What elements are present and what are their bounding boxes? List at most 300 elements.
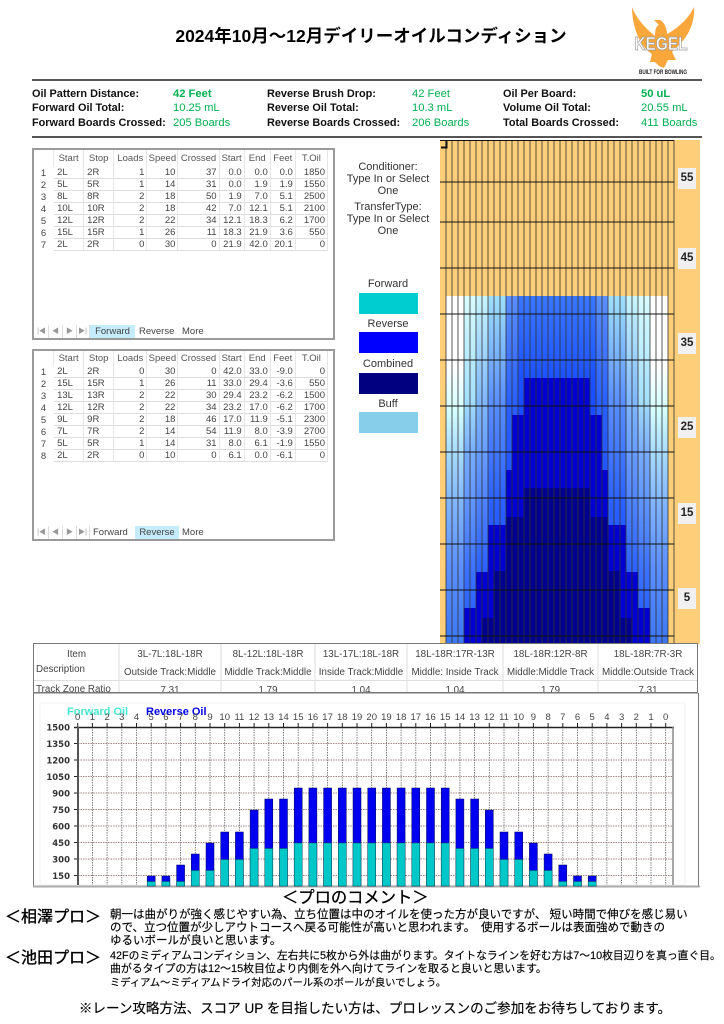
comment: Ikeda: 曲がるタイプの方は12～15枚目位より内側を外へ向けてラインを取ると良いと思います。: [110, 963, 547, 975]
panel: forward table: 1: [139, 167, 144, 178]
panel: forward table: 7.0: [255, 191, 268, 202]
panel: track zone ratio table: [33, 643, 698, 693]
x axis labels: 12: [249, 712, 259, 723]
panel: oil pattern summary: 411 Boards: [641, 116, 697, 128]
panel: reverse table: 2L: [57, 450, 68, 461]
panel: reverse table: 17.0: [249, 402, 268, 413]
panel: forward table: 21.9: [223, 239, 242, 250]
panel: forward table: 12L: [57, 215, 73, 226]
panel: forward table: 12.1: [223, 215, 242, 226]
comment: Aizawa: ゆるいボールが良いと思います。: [110, 935, 281, 947]
bar chart: oil per board: [33, 693, 700, 888]
sheet tabs: reverse: |◀: [37, 529, 46, 536]
x axis labels: 11: [234, 712, 244, 723]
panel: forward table: 2R: [87, 239, 99, 250]
panel: forward table: 1: [139, 179, 144, 190]
panel: reverse table: -3.6: [276, 378, 293, 389]
panel: forward table: 2: [41, 180, 46, 190]
panel: forward table: 20.1: [274, 239, 293, 250]
panel: forward table: 5L: [57, 179, 68, 190]
panel: oil pattern summary: Reverse Oil Total:: [267, 102, 359, 114]
panel: reverse table: 0: [320, 450, 325, 461]
panel: forward table: 0.0: [228, 179, 242, 190]
panel: reverse table: 4: [41, 402, 46, 414]
swatch: forward: [359, 293, 418, 314]
sheet tabs: forward: More: [182, 326, 204, 337]
x axis labels: 6: [163, 712, 169, 723]
panel: reverse table: 8.0: [255, 426, 268, 437]
sheet tabs: forward: Forward: [95, 326, 130, 337]
sheet tabs: reverse: More: [182, 527, 204, 538]
sheet tabs: forward: |◀: [37, 328, 46, 335]
footer note: ※レーン攻略方法、スコア UP を目指したい方は、プロレッスンのご参加をお待ちしております。: [79, 1000, 671, 1016]
panel: forward table: 18: [165, 203, 175, 214]
panel: reverse table: 5R: [87, 438, 99, 449]
y axis labels: 1350: [46, 740, 70, 750]
comment: Ikeda: ミディアム～ミディアムドライ対応のパール系のボールが良いでしょう。: [110, 978, 446, 989]
panel: forward table: 15R: [87, 227, 105, 238]
pro label: Ikeda: ＜池田プロ＞: [5, 950, 101, 967]
y axis labels: 150: [52, 872, 70, 882]
conditioner text: [347, 161, 430, 197]
sheet tabs: forward: ▶|: [78, 328, 87, 335]
panel: forward table: 550: [309, 227, 325, 238]
zone 4: Middle: Inside Track: [411, 667, 499, 678]
conditioner text: Conditioner:: [358, 161, 418, 173]
panel: oil pattern summary: [32, 88, 697, 128]
panel: forward table: 10: [165, 167, 175, 178]
x axis labels: 15: [440, 712, 450, 723]
zone 6: [602, 649, 694, 693]
panel: reverse table: -6.1: [276, 450, 293, 461]
panel: reverse table: -6.2: [276, 402, 293, 413]
panel: reverse table: Speed: [149, 352, 176, 364]
panel: reverse table: 3: [41, 390, 46, 402]
panel: reverse table: 22: [165, 390, 175, 401]
sheet tabs: forward: ▶: [66, 328, 73, 335]
panel: reverse table: 6.1: [228, 450, 242, 461]
x axis labels: 5: [149, 712, 154, 723]
zone 4: [411, 649, 499, 693]
panel: reverse table: 6: [41, 426, 46, 438]
x axis labels: 2: [634, 712, 639, 723]
panel: oil pattern summary: 50 uL: [641, 88, 670, 100]
x axis labels: 7: [178, 712, 183, 723]
panel: reverse table: 2300: [304, 414, 325, 425]
chart legend: [67, 706, 207, 718]
panel: reverse table: 2L: [57, 366, 68, 377]
zone 5: Middle:Middle Track: [507, 667, 594, 678]
pro label: Aizawa: ＜相澤プロ＞: [5, 909, 101, 926]
x axis labels: 17: [411, 712, 421, 723]
panel: forward table: 8R: [87, 191, 99, 202]
x axis labels: 15: [293, 712, 303, 723]
panel: reverse table: 17.0: [223, 414, 242, 425]
y axis labels: 600: [52, 822, 70, 832]
chart legend: Forward Oil: [67, 706, 128, 718]
panel: reverse table: 550: [309, 378, 325, 389]
panel: forward table: 7.0: [228, 203, 242, 214]
zone 1: [124, 649, 216, 693]
logo: Kegel eagle: KEGEL: [634, 34, 688, 54]
row headers: Item: [67, 649, 86, 660]
panel: oil pattern summary: Total Boards Crossed:: [503, 116, 619, 128]
panel: forward table: 37: [206, 167, 217, 178]
transfer type text: TransferType:: [354, 201, 422, 213]
x axis labels: 13: [469, 712, 480, 723]
panel: forward table: Loads: [117, 152, 143, 164]
panel: reverse table: -9.0: [276, 366, 293, 377]
panel: reverse table: 29.4: [249, 378, 268, 389]
distance label 25: [678, 417, 696, 438]
panel: reverse table: [32, 349, 335, 541]
zone 5: [507, 649, 594, 693]
panel: reverse table: 33.0: [249, 366, 268, 377]
board grid lines: [446, 140, 674, 644]
panel: forward table: T.Oil: [302, 152, 321, 164]
panel: reverse table: 14: [165, 438, 175, 449]
sheet tabs: reverse: ◀: [52, 529, 59, 536]
panel: reverse table: 1500: [304, 390, 325, 401]
logo: Kegel eagle: BUILT FOR BOWLING: [639, 70, 687, 76]
panel: reverse table: 0: [320, 366, 325, 377]
panel: oil pattern summary: 10.3 mL: [412, 102, 452, 114]
panel: forward table: 2R: [87, 167, 99, 178]
panel: forward table: 4: [41, 204, 46, 214]
x axis labels: 0: [663, 712, 668, 723]
panel: forward table: 5.1: [280, 203, 293, 214]
panel: reverse table: 11.9: [224, 426, 242, 437]
y axis labels: 1050: [46, 773, 70, 783]
panel: reverse table: 6.1: [255, 438, 268, 449]
zone 1: Outside Track:Middle: [124, 667, 216, 678]
panel: forward table: 8L: [57, 191, 68, 202]
zone 2: 8L-12L:18L-18R: [233, 649, 303, 660]
x axis labels: 1: [648, 712, 654, 723]
panel: reverse table: 7R: [87, 426, 99, 437]
y axis labels: 750: [52, 806, 70, 816]
panel: forward table: 1.9: [255, 179, 268, 190]
sheet tabs: forward: ◀: [52, 328, 59, 335]
legend: reverse: Reverse: [368, 318, 408, 330]
panel: reverse table: 7L: [57, 426, 68, 437]
legend: forward: Forward: [368, 278, 408, 290]
zone 3: [319, 649, 403, 693]
panel: reverse table: 30: [165, 366, 175, 377]
legend: combined: Combined: [363, 358, 413, 370]
panel: forward table: 3: [41, 192, 46, 202]
logo: Kegel eagle: [632, 7, 694, 76]
distance label 25: 25: [681, 421, 693, 433]
panel: reverse table: 12L: [57, 402, 73, 413]
panel: forward table: 5: [41, 216, 46, 226]
panel: forward table: 0: [139, 239, 144, 250]
panel: reverse table: 23.2: [223, 402, 242, 413]
panel: reverse table: 8: [41, 450, 46, 462]
panel: forward table: 0: [211, 239, 217, 250]
transfer type text: Type In or Select: [347, 213, 429, 225]
oil gradient bands: [446, 296, 668, 644]
x axis labels: 16: [425, 712, 436, 723]
sheet tabs: forward: [37, 325, 204, 338]
x axis labels: 20: [366, 712, 377, 723]
panel: forward table: 0.0: [228, 167, 242, 178]
panel: forward table: 1550: [304, 179, 325, 190]
panel: reverse table: 8.0: [228, 438, 242, 449]
panel: forward table: 2: [139, 215, 144, 226]
panel: forward table: 0.0: [280, 167, 293, 178]
panel: forward table: 1: [41, 168, 46, 178]
panel: reverse table: 29.4: [223, 390, 242, 401]
x axis labels: 0: [75, 712, 80, 723]
panel: reverse table: 2: [139, 414, 144, 425]
zone 5: 18L-18R:12R-8R: [513, 649, 588, 660]
panel: forward table: Start: [59, 152, 79, 164]
swatch: buff: [359, 412, 418, 433]
panel: forward table: 1.9: [228, 191, 242, 202]
panel: oil pattern summary: 206 Boards: [412, 116, 469, 128]
panel: reverse table: -1.9: [276, 438, 293, 449]
distance label 35: [678, 333, 696, 354]
panel: reverse table: 2700: [304, 426, 325, 437]
x axis labels: 6: [575, 712, 580, 723]
x axis labels: 10: [513, 712, 524, 723]
panel: forward table: 31: [206, 179, 217, 190]
y axis labels: 1500: [46, 724, 70, 734]
panel: reverse table: 14: [165, 426, 175, 437]
panel: oil pattern summary: 20.55 mL: [641, 102, 688, 114]
zone 1: 3L-7L:18L-18R: [137, 649, 203, 660]
panel: reverse table: 9L: [57, 414, 68, 425]
distance label 55: [678, 168, 696, 189]
distance label 45: [678, 248, 696, 269]
y axis labels: 450: [52, 839, 70, 849]
sheet tabs: reverse: ▶|: [78, 529, 87, 536]
panel: oil pattern summary: Volume Oil Total:: [503, 102, 591, 114]
panel: reverse table: 2: [139, 402, 144, 413]
comment: Aizawa: ので、立つ位置が少しアウトコースへ戻る可能性が高いと思われます。 使用するボールは表面強めで動きの: [110, 922, 665, 934]
x axis labels: 3: [119, 712, 124, 723]
panel: forward table: 1: [139, 227, 144, 238]
x axis labels: 16: [308, 712, 318, 723]
heavy oil zone: [464, 378, 650, 644]
panel: forward table: Start: [222, 152, 242, 164]
panel: forward table: 42.0: [249, 239, 268, 250]
x axis labels: 14: [278, 712, 289, 723]
distance label 15: 15: [681, 507, 693, 519]
zone 3: 13L-17L:18L-18R: [323, 649, 399, 660]
x axis labels: 18: [337, 712, 348, 723]
panel: forward table: Feet: [273, 152, 292, 164]
transfer type text: [347, 201, 430, 237]
panel: forward table: 11: [207, 227, 217, 238]
x axis labels: 8: [545, 712, 551, 723]
panel: oil pattern summary: 42 Feet: [173, 88, 212, 100]
panel: forward table: End: [249, 152, 266, 164]
panel: forward table: 1700: [304, 215, 325, 226]
panel: forward table: Stop: [89, 152, 108, 164]
panel: oil pattern summary: Reverse Boards Crossed:: [267, 116, 400, 128]
panel: reverse table: 11: [207, 378, 217, 389]
x axis labels: 2: [104, 712, 110, 723]
panel: reverse table: -6.2: [276, 390, 293, 401]
panel: reverse table: 7: [41, 438, 46, 450]
panel: forward table: 34: [206, 215, 217, 226]
panel: reverse table: 13R: [87, 390, 105, 401]
panel: reverse table: 5L: [57, 438, 68, 449]
x axis labels: 12: [484, 712, 495, 723]
panel: reverse table: 22: [165, 402, 175, 413]
panel: track zone ratio table: Description: [36, 664, 85, 675]
panel: forward table: Crossed: [181, 152, 216, 164]
panel: forward table: 2: [139, 191, 144, 202]
panel: reverse table: 34: [206, 402, 217, 413]
panel: reverse table: 2: [139, 426, 144, 437]
panel: reverse table: -5.1: [276, 414, 293, 425]
panel: forward table: 2L: [57, 239, 68, 250]
panel: forward table: 14: [165, 179, 175, 190]
y axis labels: 900: [52, 790, 70, 800]
panel: reverse table: T.Oil: [302, 352, 321, 364]
conditioner text: One: [378, 185, 398, 197]
x axis labels: 14: [455, 712, 465, 723]
panel: forward table: 1.9: [280, 179, 293, 190]
panel: reverse table: 33.0: [223, 378, 242, 389]
panel: reverse table: Start: [222, 352, 242, 364]
x axis labels: 13: [264, 712, 274, 723]
panel: reverse table: 11.9: [250, 414, 268, 425]
panel: forward table: 2500: [304, 191, 325, 202]
zone 2: Middle Track:Middle: [224, 667, 312, 678]
panel: reverse table: 31: [206, 438, 217, 449]
panel: reverse table: 15R: [87, 378, 105, 389]
x axis labels: 19: [381, 712, 392, 723]
axes: [74, 726, 674, 728]
panel: reverse table: 46: [206, 414, 217, 425]
zone 3: Inside Track:Middle: [319, 667, 403, 678]
panel: forward table: 30: [165, 239, 175, 250]
panel: forward table: 12.1: [249, 203, 268, 214]
panel: reverse table: 1700: [304, 402, 325, 413]
distance label 55: 55: [681, 172, 693, 184]
comment: Ikeda: 42Fのミディアムコンディション、左右共に5枚から外は曲がります。タイトなラインを好む方は7～10枚目辺りを真っ直ぐ目。: [110, 950, 721, 962]
panel: reverse table: 13L: [57, 390, 73, 401]
panel: reverse table: 42.0: [223, 366, 242, 377]
panel: forward table: 2100: [304, 203, 325, 214]
panel: reverse table: 9R: [87, 414, 99, 425]
x axis labels: 1: [90, 712, 95, 723]
zone 6: Middle:Outside Track: [602, 667, 694, 678]
panel: forward table: 18.3: [223, 227, 242, 238]
x axis labels: 19: [352, 712, 362, 723]
combined oil zone: [482, 488, 632, 644]
panel: reverse table: 18: [165, 414, 175, 425]
panel: reverse table: 0: [139, 366, 144, 377]
panel: reverse table: 0: [211, 450, 217, 461]
panel: reverse table: 0: [139, 450, 144, 461]
panel: forward table: 7: [41, 240, 46, 250]
panel: oil pattern summary: 205 Boards: [173, 116, 230, 128]
swatch: reverse: [359, 332, 418, 353]
x axis labels: 4: [604, 712, 610, 723]
x axis labels: 4: [134, 712, 139, 723]
panel: reverse table: 2R: [87, 366, 99, 377]
panel: forward table: 0: [320, 239, 325, 250]
panel: oil pattern summary: Forward Oil Total:: [32, 102, 124, 114]
panel: reverse table: 2: [139, 390, 144, 401]
zone 4: 18L-18R:17R-13R: [415, 649, 495, 660]
sheet tabs: reverse: [37, 526, 204, 539]
y axis labels: 1200: [46, 756, 70, 766]
x axis labels: 17: [322, 712, 333, 723]
title: 2024年10月～12月デイリーオイルコンディション: [175, 26, 567, 46]
forward oil bars: [147, 843, 596, 886]
distance label 5: 5: [684, 592, 690, 604]
panel: reverse table: 2R: [87, 450, 99, 461]
distance label 15: [678, 503, 696, 524]
distance label 35: 35: [681, 337, 693, 349]
panel: forward table: 42: [206, 203, 217, 214]
sheet tabs: reverse: Reverse: [139, 527, 175, 538]
comment: Aizawa: 朝一は曲がりが強く感じやすい為、立ち位置は中のオイルを使った方が良いですが、 短い時間で伸びを感じ易い: [110, 908, 688, 920]
panel: forward table: 2: [139, 203, 144, 214]
comment: Aizawa: [110, 908, 688, 947]
comment: Ikeda: [110, 950, 721, 989]
panel: reverse table: 54: [206, 426, 217, 437]
panel: forward table: 10R: [87, 203, 105, 214]
panel: forward table: Speed: [149, 152, 176, 164]
panel: forward table: 3.6: [280, 227, 293, 238]
panel: oil pattern summary: 42 Feet: [412, 88, 450, 100]
x axis labels: 8: [193, 712, 198, 723]
panel: reverse table: 10: [165, 450, 175, 461]
panel: forward table: 15L: [57, 227, 73, 238]
panel: reverse table: 23.2: [249, 390, 268, 401]
sheet tabs: reverse: ▶: [66, 529, 73, 536]
panel: oil pattern summary: Reverse Brush Drop:: [267, 88, 376, 100]
panel: reverse table: 1: [41, 366, 46, 378]
x axis labels: 10: [219, 712, 230, 723]
x axis labels: 3: [619, 712, 624, 723]
panel: reverse table: 12R: [87, 402, 105, 413]
panel: forward table: [32, 148, 335, 340]
panel: forward table: 21.9: [249, 227, 268, 238]
summary labels and values: Oil Pattern Distance:: [32, 88, 139, 100]
panel: reverse table: 0.0: [255, 450, 268, 461]
table dividers: [34, 644, 697, 692]
panel: forward table: 10L: [57, 203, 73, 214]
panel: reverse table: Start: [59, 352, 79, 364]
swatch: combined: [359, 373, 418, 394]
panel: forward table: 1850: [304, 167, 325, 178]
x axis labels: 11: [499, 712, 509, 723]
panel: forward table: 26: [165, 227, 175, 238]
x axis labels: 5: [590, 712, 595, 723]
distance label 5: [678, 588, 696, 609]
panel: reverse table: 1: [139, 378, 144, 389]
x axis labels: 7: [560, 712, 565, 723]
reverse oil bars: [147, 788, 596, 886]
sheet tabs: reverse: Forward: [93, 527, 128, 538]
x axis labels: 18: [396, 712, 406, 723]
zone 6: 18L-18R:7R-3R: [614, 649, 682, 660]
x axis labels: [75, 712, 668, 723]
distance label 45: 45: [681, 252, 693, 264]
panel: forward table: 0.0: [255, 167, 268, 178]
zone 2: [224, 649, 312, 693]
panel: reverse table: Stop: [89, 352, 108, 364]
comment heading: ＜プロのコメント＞: [282, 889, 429, 907]
